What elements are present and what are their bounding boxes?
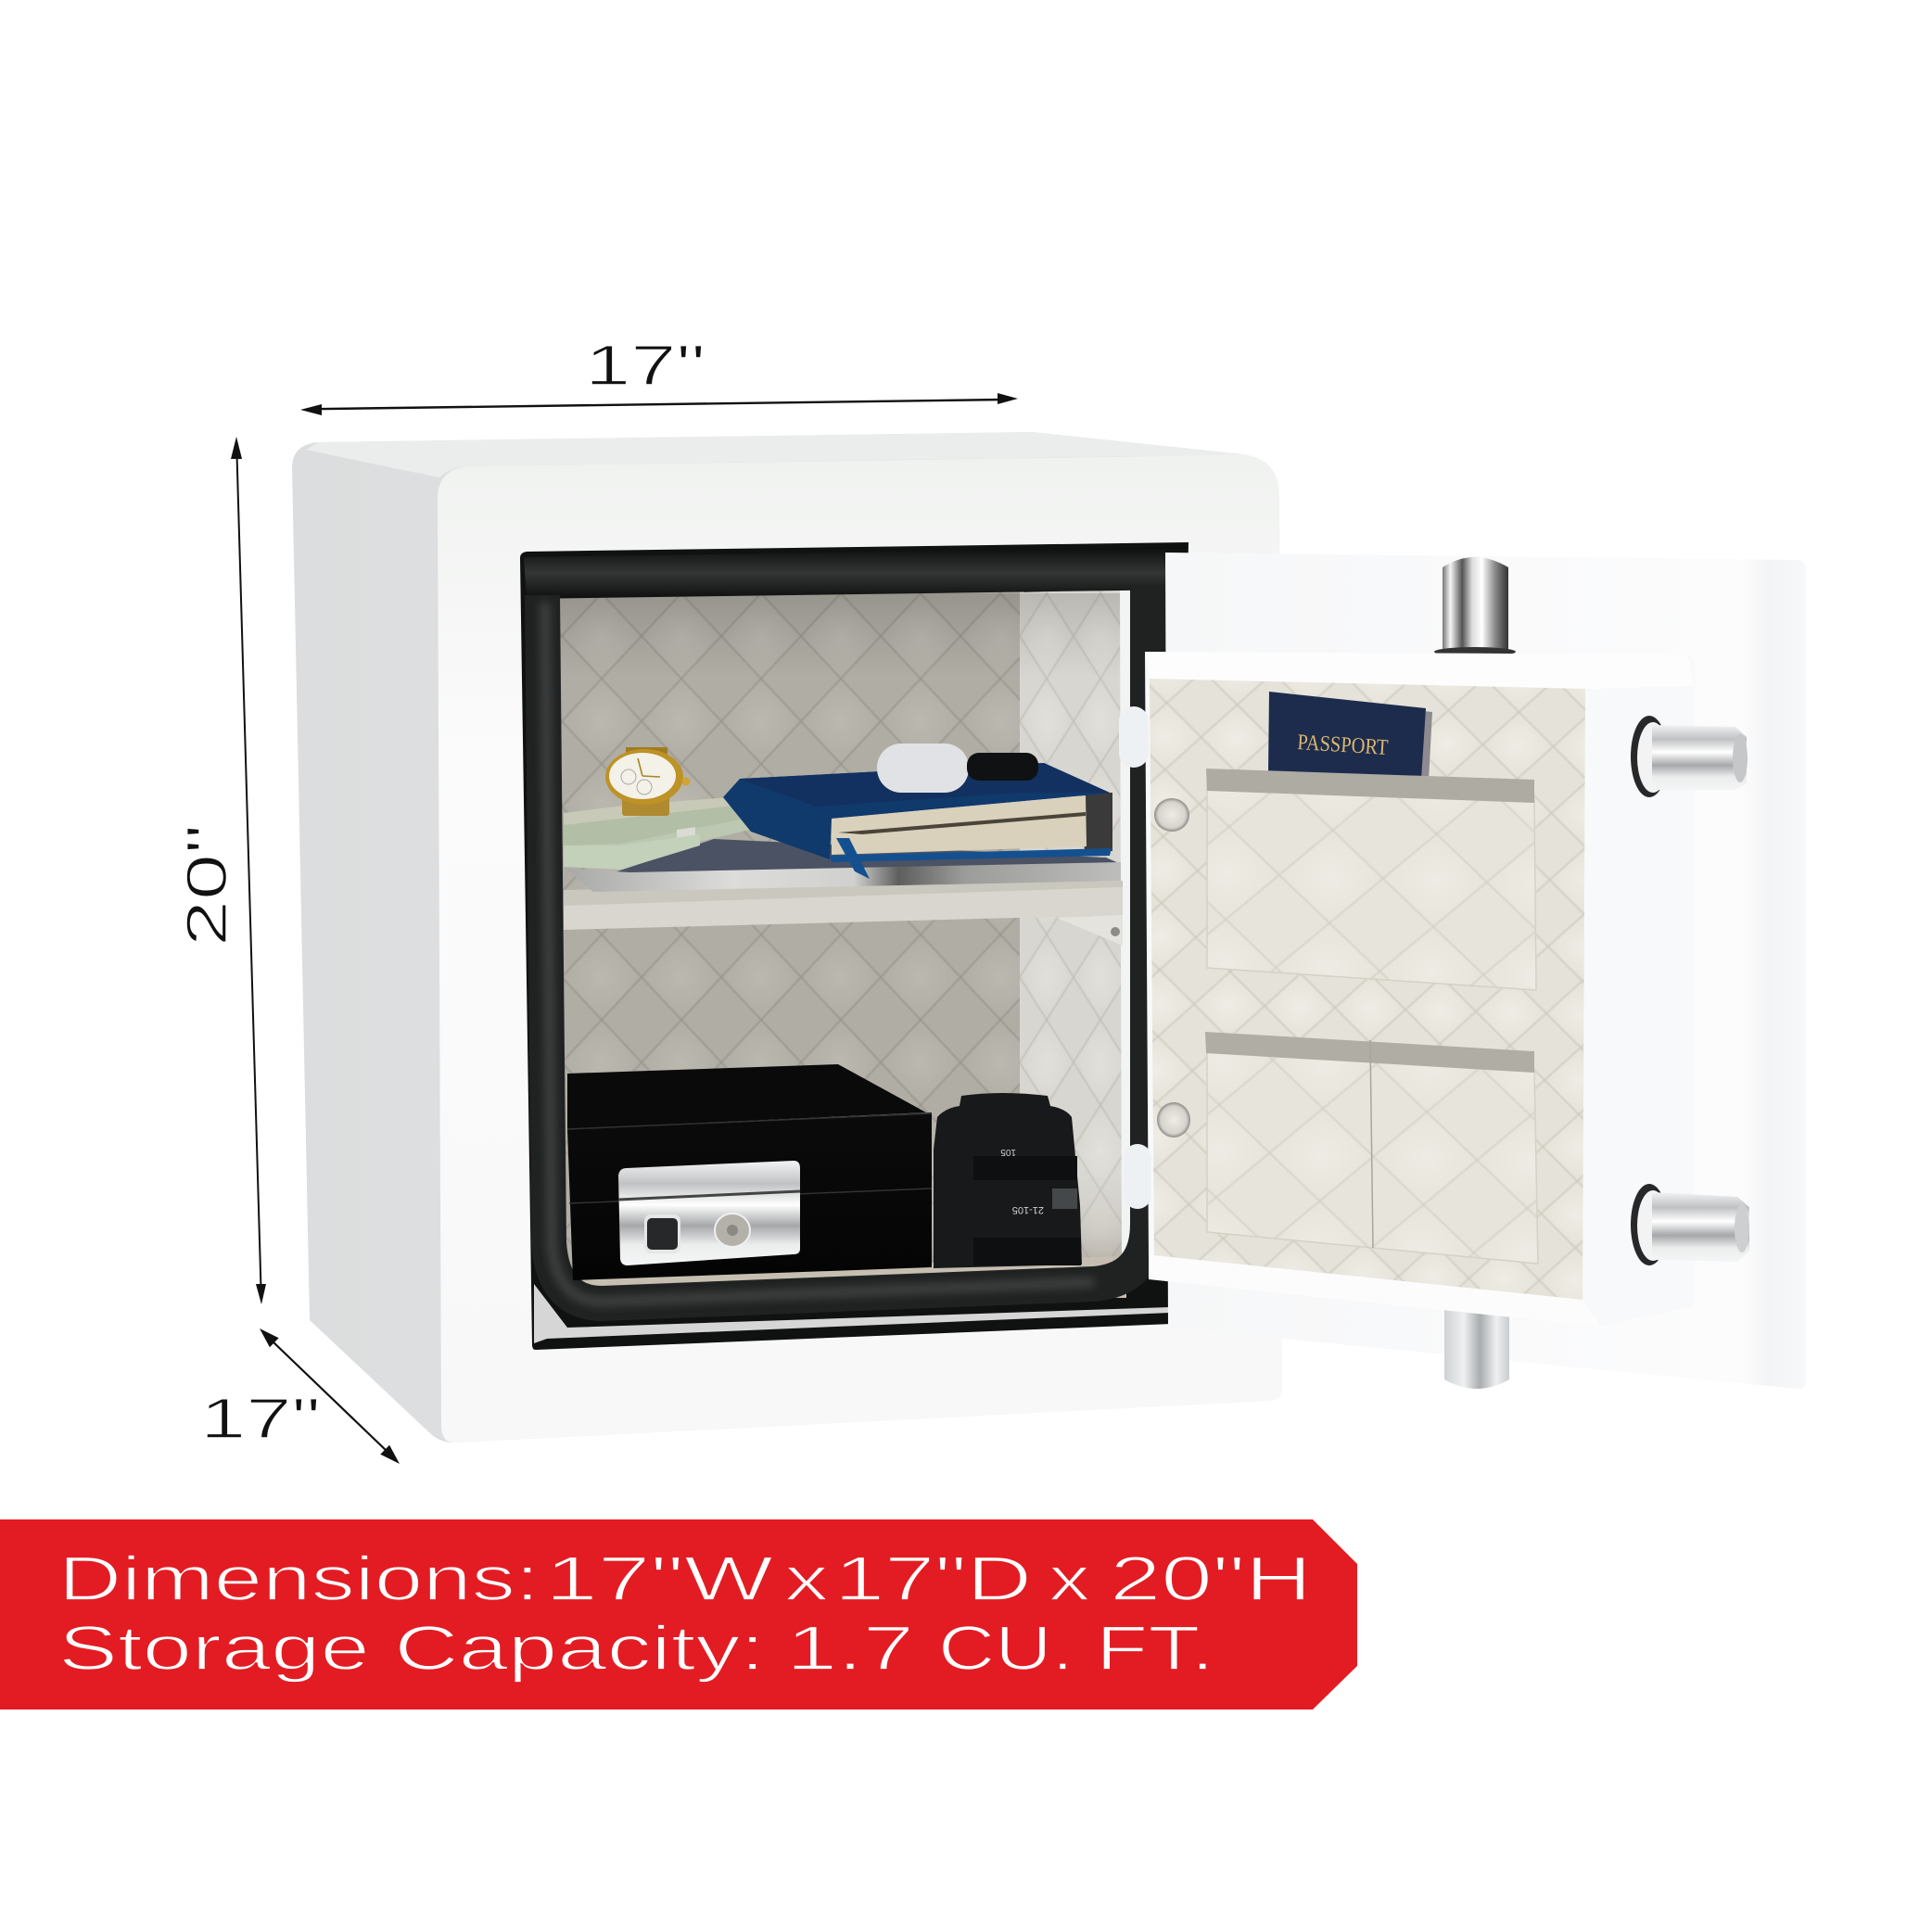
banner line 1: dimensions: x bbox=[1049, 1544, 1090, 1614]
passport: PASSPORT bbox=[1297, 731, 1389, 760]
light sliver under gasket bbox=[534, 1284, 1170, 1343]
safe front face bbox=[438, 455, 1282, 1443]
interior shading bbox=[556, 593, 1124, 1298]
lower pockets bbox=[1196, 1032, 1548, 1270]
door back plate bbox=[1165, 553, 1806, 1389]
camera lens: 105 bbox=[1000, 1147, 1016, 1157]
banner line 2: storage capacity bbox=[58, 1613, 1214, 1684]
top locking bolt bbox=[1434, 557, 1516, 656]
banner line 2: storage capacity: Storage Capacity: bbox=[58, 1613, 765, 1684]
stack of cash bbox=[564, 795, 757, 870]
dimension label: depth 17 inches: 17" bbox=[200, 1387, 321, 1450]
retaining pins bbox=[1119, 706, 1151, 1209]
safe body bbox=[292, 432, 1806, 1443]
banner line 1: dimensions: Dimensions: bbox=[58, 1544, 540, 1614]
dimension arrow: height bbox=[231, 437, 266, 1304]
back wall quilting bbox=[560, 591, 1024, 1270]
banner line 2: storage capacity: CU. bbox=[938, 1613, 1074, 1684]
door rivets bbox=[1154, 798, 1190, 1138]
top gasket bbox=[524, 547, 1187, 599]
gold watch bbox=[605, 747, 690, 816]
door inner box side bbox=[1145, 652, 1695, 1327]
door inner box top band bbox=[1145, 652, 1695, 689]
earbuds case bbox=[877, 744, 969, 793]
bottom locking bolt bbox=[1444, 1309, 1509, 1389]
banner line 1: dimensions: 17"W bbox=[545, 1544, 773, 1614]
camera lens: 21-105 bbox=[1012, 1204, 1044, 1215]
banner line 1: dimensions: 20"H bbox=[1110, 1544, 1312, 1614]
dimension label: height 20 inches: 20" bbox=[175, 824, 238, 947]
passport bbox=[1268, 692, 1432, 781]
upper pocket bbox=[1206, 769, 1537, 991]
banner line 1: dimensions: 17"D bbox=[834, 1544, 1032, 1614]
lower side bolt bbox=[1631, 1184, 1749, 1265]
chrome latch bbox=[618, 1161, 800, 1265]
dimension arrow: width bbox=[300, 393, 1018, 415]
gasket tube left, bottom and right bbox=[542, 586, 1148, 1303]
laptop bbox=[566, 839, 1121, 892]
door box bottom lip bbox=[1149, 1255, 1601, 1327]
floor bbox=[561, 1256, 1126, 1298]
dimension label: top width 17 inches: 17" bbox=[585, 334, 705, 397]
banner line 2: storage capacity: FT. bbox=[1096, 1613, 1214, 1684]
white side strip bbox=[1120, 588, 1135, 1279]
banner line 1: dimensions: x bbox=[784, 1544, 829, 1614]
quilted door panel bbox=[1140, 667, 1595, 1307]
dimension arrow: depth bbox=[260, 1328, 400, 1464]
door opening bbox=[520, 542, 1188, 1350]
blue notebook bbox=[723, 763, 1112, 879]
red banner bbox=[0, 1519, 1357, 1710]
upper side bolt bbox=[1631, 716, 1748, 797]
safe top face bbox=[306, 432, 1243, 477]
upper shelf bbox=[564, 881, 1123, 946]
side wall quilting bbox=[1020, 591, 1122, 1258]
banner line 2: storage capacity: 1.7 bbox=[786, 1613, 914, 1684]
safe left side and outline bbox=[292, 432, 1282, 1443]
black jewelry box bbox=[567, 1064, 932, 1280]
black phone bbox=[967, 753, 1038, 781]
open door bbox=[1119, 553, 1806, 1389]
banner line 1: dimensions bbox=[58, 1544, 1312, 1614]
camera lens bbox=[934, 1093, 1082, 1268]
